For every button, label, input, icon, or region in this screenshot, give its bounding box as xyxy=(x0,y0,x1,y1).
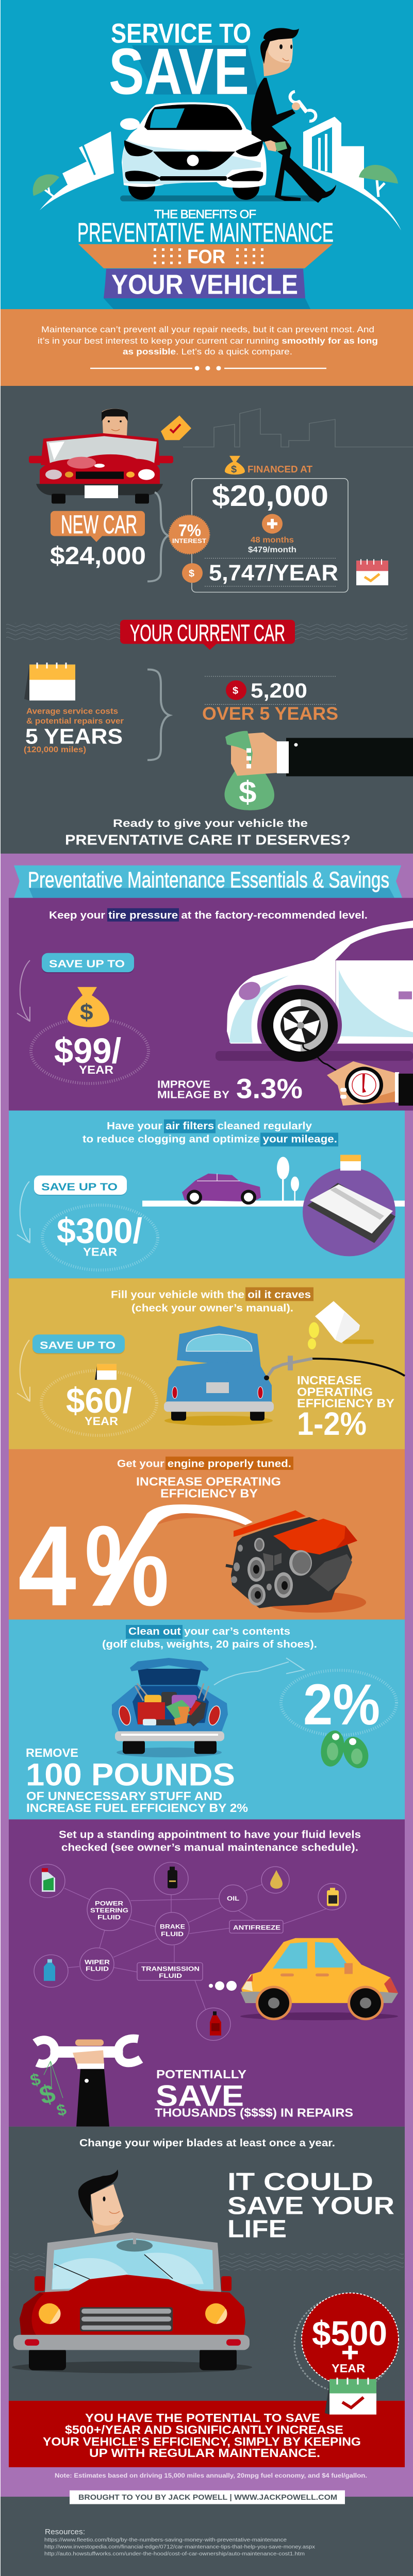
panel: conclusion: $500+/YEAR AND SIGNIFICANTLY INCREASE xyxy=(65,2423,343,2436)
illustration: wrench in hand xyxy=(28,2039,141,2127)
title: service to save: SAVE xyxy=(109,35,249,108)
tip text: Keep your tire pressure at the factory-recommended level. xyxy=(49,909,368,921)
panel: footer xyxy=(0,2490,413,2576)
text: increase operating efficiency xyxy=(297,1374,394,1442)
labels: fluids xyxy=(85,1894,280,1979)
labels: fluids: TRANSMISSION xyxy=(141,1965,200,1973)
icon: red bottle xyxy=(210,2011,221,2036)
illustration: man in red car xyxy=(29,409,191,503)
resources xyxy=(44,2528,316,2557)
callout: ready to give: PREVENTATIVE CARE IT DESERVES? xyxy=(65,832,351,848)
title: service to save xyxy=(109,18,251,108)
text: average service costs xyxy=(24,707,124,754)
pill: save up to: SAVE UP TO xyxy=(41,1181,118,1193)
badge: 500 plus per year: YEAR xyxy=(332,2362,365,2375)
amount: 99 per year: $99/ xyxy=(54,1030,121,1071)
badge: 7 percent interest: 7% xyxy=(178,521,201,540)
icon: money bag xyxy=(225,456,245,475)
callout: ready to give xyxy=(65,818,351,848)
panel: oil xyxy=(9,1278,405,1449)
text: increase operating efficiency xyxy=(136,1475,281,1500)
diagram: fluid network xyxy=(30,1862,346,2040)
panel: wiper blades xyxy=(9,2127,405,2401)
text: increase operating efficiency: 1-2% xyxy=(297,1406,367,1442)
labels: fluids: STEERING xyxy=(90,1906,128,1914)
illustration: man in red car xyxy=(12,2170,252,2373)
tip text: (check your owner’s manual). xyxy=(131,1302,293,1314)
text: remove 100 pounds: 100 POUNDS xyxy=(26,1757,235,1792)
panel: air filters xyxy=(9,1111,405,1278)
amount: 5200 xyxy=(226,679,307,702)
intro paragraph: it’s in your best interest to keep your current car running smoothly for as long xyxy=(38,336,378,346)
icon: money bag: $ xyxy=(231,464,237,475)
savings ring xyxy=(42,1205,158,1270)
illustration: wrench in hand: $ xyxy=(36,2078,58,2110)
pill: save up to xyxy=(42,953,134,973)
intro paragraph: Maintenance can’t prevent all your repair needs, but it can prevent most. And xyxy=(41,325,374,334)
icon: black bottle xyxy=(168,1867,177,1888)
amount: 20000: $20,000 xyxy=(212,480,328,513)
icon: coolant bottle xyxy=(42,1868,55,1892)
heading: it could save your life: SAVE YOUR xyxy=(227,2193,394,2219)
callout: ready to give: Ready to give your vehicle the xyxy=(113,818,308,829)
amount: 99 per year: YEAR xyxy=(79,1063,113,1076)
resources: http://auto.howstuffworks.com/under-the-hood/cost-of-car-ownership/auto-maintenance-cost1.htm xyxy=(44,2551,305,2557)
savings ring xyxy=(41,1370,157,1435)
panel: tire pressure xyxy=(9,898,413,1111)
tip text xyxy=(82,1120,337,1145)
illustration: wrench in hand: $ xyxy=(28,2070,43,2090)
text: improve mileage: IMPROVE xyxy=(157,1079,210,1090)
badge: 7 percent interest xyxy=(169,515,209,554)
text: average service costs: 5 YEARS xyxy=(25,725,123,749)
text: over 5 years: OVER 5 YEARS xyxy=(202,703,338,724)
badge: 500 plus per year: $500 xyxy=(312,2314,387,2353)
illustration: hand with money bag xyxy=(224,731,413,810)
icon: oil drop xyxy=(270,1870,283,1889)
text: potentially save: POTENTIALLY xyxy=(156,2067,246,2081)
icon: nozzle and hose xyxy=(264,1355,405,1380)
panel: essentials background xyxy=(0,854,413,2497)
illustration: car trunk xyxy=(112,1658,228,1757)
illustration: wrench in hand: $ xyxy=(55,2100,68,2120)
badge: 500 plus per year xyxy=(294,2293,399,2415)
label: new car price: $24,000 xyxy=(50,543,146,570)
tip text: Change your wiper blades at least once a year. xyxy=(79,2137,335,2149)
title: service to save: SERVICE TO xyxy=(111,18,251,49)
labels: fluids: ANTIFREEZE xyxy=(233,1924,280,1931)
illustration: engine xyxy=(226,1510,366,1613)
footnote: Note: Estimates based on driving 15,000 miles annually, 20mpg fuel economy, and $4 fuel/gallon. xyxy=(55,2471,367,2479)
text: increase operating efficiency: EFFICIENCY BY xyxy=(297,1397,394,1410)
heading: your current car xyxy=(120,620,295,650)
text: improve mileage xyxy=(157,1073,303,1104)
credit bar: BROUGHT TO YOU BY JACK POWELL | WWW.JACKPOWELL.COM xyxy=(78,2494,337,2502)
illustration: yellow car xyxy=(209,1938,398,2020)
text: improve mileage: MILEAGE BY xyxy=(157,1089,229,1101)
tip text xyxy=(102,1626,317,1650)
stat: 4 percent: 4 xyxy=(18,1503,76,1630)
text: term xyxy=(248,536,296,554)
icon: yellow calendar xyxy=(24,663,75,701)
banner: for: FOR xyxy=(187,246,225,268)
panel: conclusion: YOU HAVE THE POTENTIAL TO SAVE xyxy=(85,2411,320,2425)
panel: conclusion: UP WITH REGULAR MAINTENANCE. xyxy=(89,2446,320,2460)
banner: your vehicle: YOUR VEHICLE xyxy=(111,269,298,300)
label: new car price xyxy=(50,510,146,570)
banner: for xyxy=(78,244,333,268)
text: remove 100 pounds: OF UNNECESSARY STUFF AND xyxy=(26,1790,222,1803)
arrow xyxy=(17,1181,30,1243)
pill: save up to xyxy=(32,1334,125,1354)
stat: 4 percent: % xyxy=(85,1503,169,1630)
icon: red calendar xyxy=(356,559,388,585)
labels: fluids: FLUID xyxy=(159,1972,182,1979)
illustration: hand with tire gauge xyxy=(303,1044,413,1106)
stat: 4 percent xyxy=(18,1503,253,1630)
pill: save up to: SAVE UP TO xyxy=(40,1340,115,1351)
heading: it could save your life: IT COULD xyxy=(227,2168,373,2196)
pill: save up to xyxy=(34,1176,127,1196)
illustration: road with purple car xyxy=(142,1157,405,1207)
resources: Resources: xyxy=(45,2528,85,2536)
icon: money bag: $ xyxy=(80,999,93,1025)
text: term: 48 months xyxy=(251,536,294,545)
illustration: air filter in circle xyxy=(303,1155,395,1256)
amount: 300 per year: YEAR xyxy=(83,1246,117,1258)
illustration: white car with tire xyxy=(216,921,413,1062)
labels: fluids: BRAKE xyxy=(160,1923,185,1930)
illustration: blue car rear xyxy=(164,1326,274,1426)
banner: your vehicle xyxy=(104,269,311,310)
text: financed at: FINANCED AT xyxy=(247,464,313,474)
icon: left building and tree xyxy=(33,131,114,210)
tip text: checked (see owner’s manual maintenance schedule). xyxy=(61,1842,358,1853)
text: remove 100 pounds: REMOVE xyxy=(26,1747,78,1759)
subtitle: the benefits of: THE BENEFITS OF xyxy=(154,208,256,221)
icon: calendar xyxy=(95,1364,117,1380)
tip text: Have your air filters cleaned regularly xyxy=(107,1120,312,1132)
heading: it could save your life xyxy=(227,2168,394,2243)
icon: oil jug xyxy=(308,1301,374,1349)
labels: fluids: WIPER xyxy=(85,1958,110,1965)
text: increase operating efficiency: OPERATING xyxy=(297,1385,373,1399)
pill: save up to: SAVE UP TO xyxy=(49,958,125,970)
panel: engine xyxy=(9,1449,405,1630)
savings ring xyxy=(281,1670,397,1735)
panel: fluid levels xyxy=(9,1819,405,2127)
text: remove 100 pounds: INCREASE FUEL EFFICIENCY BY 2% xyxy=(26,1802,248,1815)
tip text xyxy=(111,1289,311,1314)
panel: financing box xyxy=(182,456,348,592)
labels: fluids: POWER xyxy=(95,1900,123,1907)
icon: money bag xyxy=(68,987,109,1027)
heading: it could save your life: LIFE xyxy=(227,2216,287,2243)
amount: 5200: $ xyxy=(233,685,238,696)
panel: conclusion xyxy=(9,2401,405,2467)
intro paragraph xyxy=(38,325,378,357)
icon: blue jug xyxy=(44,1959,55,1981)
heading: your current car: YOUR CURRENT CAR xyxy=(130,620,285,646)
amount: per year: 5,747/YEAR xyxy=(209,560,338,585)
amount: per year: $ xyxy=(189,568,194,579)
illustration: man with wrench xyxy=(251,28,336,203)
icon: yellow jug xyxy=(327,1888,339,1906)
tip text: Set up a standing appointment to have your fluid levels xyxy=(59,1829,361,1841)
panel: compare xyxy=(0,386,413,854)
panel: intro xyxy=(0,309,413,386)
text: potentially save: SAVE xyxy=(156,2080,244,2112)
tip text: Fill your vehicle with the oil it craves xyxy=(111,1289,311,1300)
text: average service costs: & potential repairs over xyxy=(26,717,124,725)
text: potentially save: THOUSANDS ($$$$) IN REPAIRS xyxy=(155,2106,353,2119)
text: average service costs: (120,000 miles) xyxy=(24,745,86,754)
icon: green calendar xyxy=(325,2378,376,2415)
tip text: Get your engine properly tuned. xyxy=(117,1458,291,1469)
text: remove 100 pounds xyxy=(26,1747,248,1815)
labels: fluids: FLUID xyxy=(161,1930,184,1938)
labels: fluids: FLUID xyxy=(97,1913,121,1921)
amount: 300 per year: $300/ xyxy=(57,1211,142,1250)
resources: http://www.investopedia.com/financial-edge/0712/car-maintenance-tips-that-help-you-save-money.aspx xyxy=(44,2545,316,2550)
tip text: (golf clubs, weights, 20 pairs of shoes). xyxy=(102,1638,317,1650)
icon: plus xyxy=(262,514,283,534)
label: new car price: NEW CAR xyxy=(61,510,137,539)
illustration: hand with money bag: $ xyxy=(239,775,256,809)
tip text: Clean out your car’s contents xyxy=(128,1626,290,1637)
text: potentially save xyxy=(155,2067,353,2119)
stat: 2 percent: 2% xyxy=(303,1672,380,1737)
icon: white car front xyxy=(120,102,318,201)
arrow xyxy=(17,1340,30,1401)
text: term: $479/month xyxy=(248,546,296,554)
text: improve mileage: 3.3% xyxy=(236,1073,303,1104)
tip text xyxy=(59,1829,361,1853)
amount: 60 per year: $60/ xyxy=(66,1381,132,1420)
labels: fluids: OIL xyxy=(227,1894,239,1902)
panel: clean out xyxy=(9,1620,405,1819)
text: increase operating efficiency: EFFICIENCY BY xyxy=(160,1487,258,1500)
panel: header xyxy=(0,0,413,310)
amount: 60 per year: YEAR xyxy=(85,1415,118,1428)
labels: fluids: FLUID xyxy=(86,1965,109,1973)
icon: flip flops xyxy=(318,1728,373,1772)
intro paragraph: as possible . Let’s do a quick compare. xyxy=(123,347,292,357)
tip text: to reduce clogging and optimize your mileage. xyxy=(82,1133,337,1145)
text: increase operating efficiency: INCREASE xyxy=(297,1374,361,1387)
text: increase operating efficiency: INCREASE OPERATING xyxy=(136,1475,281,1488)
credit bar xyxy=(70,2490,345,2504)
badge: 7 percent interest: INTEREST xyxy=(172,537,206,545)
arrow xyxy=(17,960,30,1022)
resources: https://www.fleetio.com/blog/by-the-numbers-saving-money-with-preventative-maintenance xyxy=(44,2537,287,2543)
panel: conclusion: YOUR VEHICLE’S EFFICIENCY, SIMPLY BY KEEPING xyxy=(43,2435,361,2448)
savings ring xyxy=(31,1019,148,1083)
icon: right building and tree xyxy=(303,116,401,230)
text: average service costs: Average service costs xyxy=(26,707,118,716)
amount: 5200: 5,200 xyxy=(251,679,307,702)
